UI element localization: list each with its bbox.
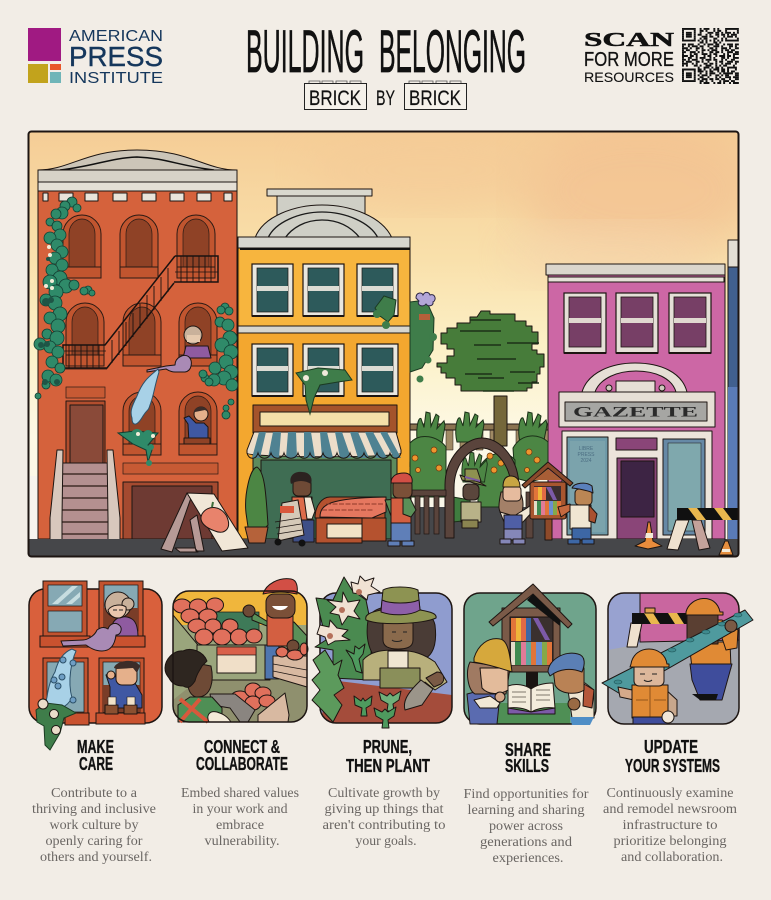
flower pot plant	[245, 467, 268, 543]
water stream	[46, 649, 76, 708]
sign arch	[582, 363, 687, 392]
crate with apples	[273, 643, 308, 687]
illustration: gardener	[312, 576, 452, 728]
figure: man with blue cap	[558, 483, 597, 544]
Gazette sign: GAZETTE	[573, 404, 698, 420]
barricade	[667, 508, 739, 550]
back fence	[410, 424, 548, 450]
storefront	[562, 431, 712, 539]
text: Update description: infrastructure to	[622, 818, 718, 833]
panel: update your systems	[602, 593, 753, 865]
bushes	[410, 412, 548, 522]
figure: boy with cap	[548, 653, 594, 725]
subtitle: Brick by Brick: BY	[376, 87, 395, 110]
figure: grandmother	[105, 592, 138, 636]
text: Prune description: Cultivate growth by	[328, 786, 440, 801]
text: Make Care description: openly caring for	[46, 834, 143, 849]
QR code	[682, 29, 739, 83]
heading: Prune, Then Plant: THEN PLANT	[346, 756, 430, 776]
pale plaza at left of the red building	[28, 476, 38, 540]
figure: vendor	[385, 473, 416, 546]
tree	[437, 311, 544, 446]
teal plate	[602, 610, 753, 695]
ivy: window-box vine	[118, 429, 158, 466]
text: Update description: and collaboration.	[621, 850, 723, 865]
figure: person with curly hair	[165, 649, 231, 722]
trowel	[404, 672, 444, 710]
panel: street scene	[28, 120, 760, 557]
text: Make Care description: thriving and inclusive	[32, 802, 156, 817]
striped awning	[247, 432, 401, 458]
text: Update description: prioritize belonging	[614, 834, 726, 849]
figure: woman with yellow beanie	[499, 476, 534, 544]
infographic canvas: BELONGING	[379, 18, 526, 85]
oranges	[412, 447, 540, 473]
gray walkway behind arch	[410, 507, 548, 539]
panel: share skills	[464, 584, 596, 866]
figure: man waving in window	[184, 407, 210, 444]
sky background	[30, 132, 738, 539]
little library	[489, 584, 572, 690]
illustration: builders	[602, 593, 753, 724]
apple stand	[315, 497, 386, 543]
building: red brownstone	[34, 150, 238, 545]
storefront: LIBRE	[579, 446, 594, 452]
logo: American Press Institute	[28, 28, 163, 87]
ivy: left climbing vine	[34, 197, 95, 399]
heading: Prune, Then Plant	[346, 737, 430, 776]
vine on top window	[373, 296, 396, 329]
text: Prune description: your goals.	[356, 834, 416, 849]
scan prompt: RESOURCES	[584, 69, 674, 85]
heading: Prune, Then Plant: PRUNE,	[363, 737, 412, 757]
text: Connect description: in your work and	[192, 802, 288, 817]
flowers	[317, 576, 380, 645]
heading: Make Care	[77, 737, 114, 774]
panel: make care	[29, 581, 162, 865]
big flowering plant	[315, 577, 372, 680]
figure: gardener	[363, 587, 447, 690]
water stream	[131, 369, 159, 424]
hanging plant with flower	[410, 292, 437, 382]
panel: prune then plant	[312, 576, 452, 849]
text: Connect description: vulnerability.	[204, 834, 280, 849]
text: Share description: generations and	[480, 835, 572, 850]
barrier	[627, 608, 690, 647]
building: pink Gazette	[546, 240, 739, 539]
text: Connect description: embrace	[216, 818, 264, 833]
text: Prune description: giving up things that	[324, 802, 444, 817]
heading: Share Skills	[505, 740, 551, 776]
scan prompt: SCAN	[584, 29, 675, 51]
A-frame apple sign	[161, 493, 248, 552]
side fence	[410, 490, 533, 538]
street	[28, 539, 739, 557]
heading: Make Care: MAKE	[77, 737, 114, 757]
figure: girl with beanie	[467, 639, 512, 724]
heading: Share Skills: SHARE	[505, 740, 551, 760]
cart with apples	[210, 683, 289, 722]
text: Update description: and remodel newsroom	[603, 802, 737, 817]
text: Make Care description: work culture by	[50, 818, 138, 833]
windows grid	[564, 293, 711, 353]
storefront: 2024	[580, 458, 592, 464]
vine on second floor	[296, 368, 352, 414]
storefront: PRESS	[578, 452, 595, 458]
illustration: apple stand	[165, 579, 308, 722]
heading: Update Your Systems: YOUR SYSTEMS	[625, 756, 720, 776]
text: Make Care description: others and yourself.	[40, 850, 152, 865]
heading: Connect and Collaborate: CONNECT &	[204, 737, 280, 757]
windows grid	[63, 215, 217, 455]
subtitle: Brick by Brick	[304, 81, 466, 110]
panel: connect and collaborate	[165, 579, 308, 849]
building: yellow storefront	[238, 189, 410, 539]
subtitle: Brick by Brick: BRICK	[409, 87, 461, 110]
windows grid	[252, 264, 398, 396]
figure: gardener behind arch	[460, 469, 486, 528]
seedlings	[346, 644, 401, 728]
text: Share description: power across	[489, 819, 563, 834]
heading: Share Skills: SKILLS	[505, 756, 549, 776]
scan prompt: FOR MORE	[584, 49, 674, 71]
figure: man waving	[106, 661, 142, 708]
window frames	[43, 581, 144, 714]
figure: man with cart	[274, 472, 315, 546]
text: Update description: Continuously examine	[606, 786, 734, 801]
Gazette sign	[559, 392, 715, 427]
book	[508, 683, 555, 714]
figure: grandmother with watering can	[147, 326, 211, 372]
shopfront	[253, 452, 397, 539]
front door	[66, 387, 105, 464]
vine with flowers	[36, 699, 76, 750]
text: Connect description: Embed shared values	[181, 786, 299, 801]
logo: American Press Institute: AMERICAN	[69, 28, 163, 45]
text: Share description: Find opportunities for	[464, 787, 589, 802]
watering can	[61, 623, 121, 651]
text: Prune description: aren't contributing to	[322, 818, 446, 833]
text: Share description: learning and sharing	[468, 803, 584, 818]
title: Building Belonging: BUILDING	[246, 18, 364, 85]
small plant	[312, 650, 344, 722]
illustration: library and readers	[464, 584, 596, 725]
ivy: right vine	[199, 303, 238, 419]
ivy berries and blossoms	[38, 245, 60, 385]
logo: American Press Institute: PRESS	[69, 41, 163, 72]
text: Share description: experiences.	[492, 851, 564, 866]
scan prompt	[584, 29, 675, 85]
logo: American Press Institute: INSTITUTE	[69, 70, 163, 87]
little free library	[522, 462, 573, 540]
figure: front worker	[618, 649, 677, 724]
window box flowers	[105, 697, 137, 714]
traffic cones	[635, 522, 733, 555]
heading: Update Your Systems: UPDATE	[644, 737, 698, 757]
figure: back worker	[686, 598, 738, 700]
heading: Connect and Collaborate: COLLABORATE	[196, 754, 288, 774]
heading: Update Your Systems	[625, 737, 720, 776]
text: Make Care description: Contribute to a	[51, 786, 138, 801]
fire escape	[62, 256, 218, 369]
garage	[123, 463, 218, 539]
stoop stairs	[50, 450, 120, 545]
illustration: neighbours at windows	[29, 581, 162, 750]
heading: Connect and Collaborate	[196, 737, 288, 774]
shop sign	[253, 405, 397, 433]
heading: Make Care: CARE	[79, 754, 113, 774]
hand cart	[274, 500, 306, 546]
apples heap	[173, 598, 262, 645]
garden: fence, bushes, orange tree	[410, 311, 548, 539]
arch gate	[445, 438, 519, 538]
figure: vendor	[243, 579, 307, 679]
water drops	[51, 657, 76, 703]
subtitle: Brick by Brick: BRICK	[309, 87, 361, 110]
